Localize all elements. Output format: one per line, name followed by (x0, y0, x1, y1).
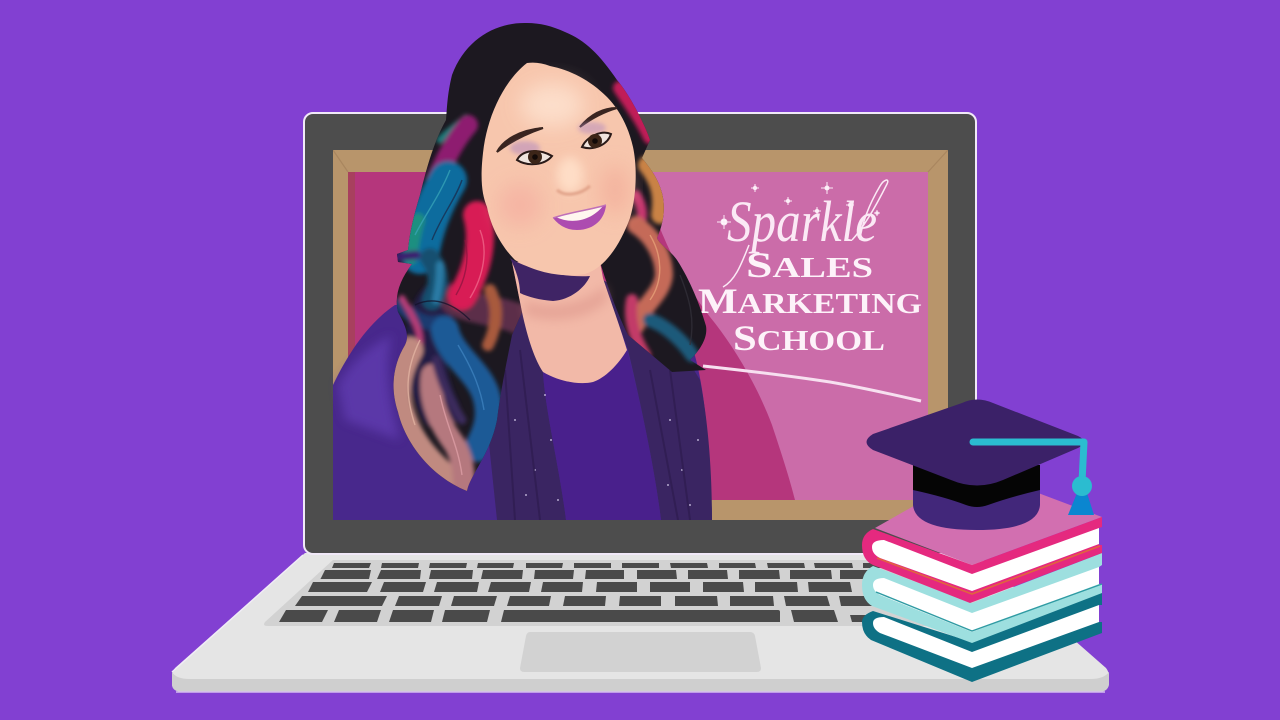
chalk line (703, 366, 921, 401)
nose shadow (557, 186, 590, 194)
choker scarf (510, 258, 590, 301)
tassel cord (973, 442, 1084, 482)
left eyebrow (497, 128, 543, 152)
right colour blobs (620, 88, 692, 355)
white pages (872, 528, 1099, 591)
SALES: SALES (746, 245, 873, 285)
board logo text (698, 180, 922, 401)
presenter photo illustration (333, 20, 715, 520)
laptop (172, 113, 1109, 692)
laptop base (172, 553, 1109, 692)
cap band (913, 465, 1040, 507)
top pink book (862, 470, 1102, 603)
SCHOOL: SCHOOL (733, 318, 885, 358)
illustration: laptop with presenter and books (172, 23, 1109, 693)
wooden frame (333, 150, 948, 520)
left colour blobs (397, 118, 520, 485)
right eye (578, 122, 611, 148)
neck and chest (512, 262, 627, 383)
cap base (913, 467, 1040, 530)
board left shadow (348, 172, 355, 357)
keyboard (264, 560, 1018, 626)
pink spine and binding (862, 517, 1102, 603)
script swash (723, 180, 888, 287)
Sparkle script wordmark: Sparkle (727, 189, 877, 254)
hair with colour strands (390, 20, 715, 495)
graduation cap (866, 400, 1094, 530)
fine hair strands (408, 170, 692, 475)
right eyebrow (580, 108, 617, 127)
chalkboard slide on screen (333, 150, 948, 520)
cap mortarboard (866, 400, 1084, 486)
sparkles (717, 182, 880, 229)
purple top (543, 350, 661, 520)
hair base (390, 20, 715, 495)
sweater highlight (338, 335, 400, 440)
left scarf panel (489, 312, 566, 520)
pink cover (875, 470, 1102, 565)
mouth (553, 205, 606, 230)
face highlights (520, 83, 584, 127)
tassel knot (1072, 476, 1092, 496)
MARKETING: MARKETING (698, 281, 922, 321)
trackpad (520, 632, 761, 672)
book stack (862, 470, 1102, 682)
dark pink arc (348, 172, 795, 500)
left eye (510, 141, 552, 164)
bottom teal book (862, 592, 1102, 682)
scarf folds (505, 350, 690, 520)
neck shading (525, 285, 608, 320)
right scarf panel (603, 280, 712, 520)
face (482, 63, 636, 275)
laptop screen bezel (304, 113, 976, 554)
purple sweater (333, 290, 712, 520)
tassel fringe (1068, 493, 1094, 515)
middle light teal book (862, 553, 1102, 643)
scarf glitter (514, 394, 699, 506)
pink board (652, 172, 928, 500)
